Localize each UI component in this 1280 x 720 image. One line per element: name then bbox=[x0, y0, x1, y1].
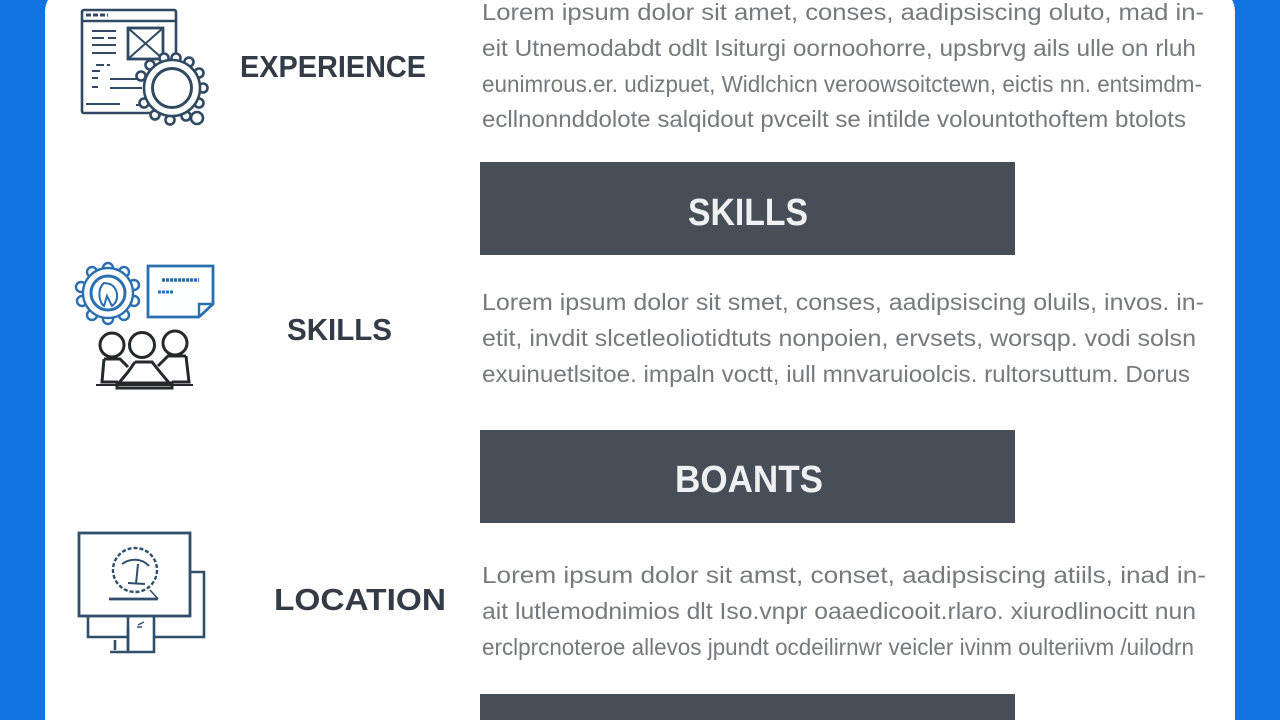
icon: overlapping screens with gauge bbox=[79, 533, 204, 652]
text block: skills description: etit, invdit slcetleoliotidtuts nonpoien, ervsets, worsqp. vodi solsn bbox=[482, 325, 1196, 351]
label: location: LOCATION bbox=[274, 582, 446, 617]
text block: skills description: exuinuetlsitoe. impaln voctt, iull mnvaruioolcis. rultorsuttum. Dorus bbox=[482, 361, 1190, 387]
text block: location description: erclprcnoteroe allevos jpundt ocdeilirnwr veicler ivinm oulteriivm /uilodrn bbox=[482, 634, 1194, 660]
row: experience bbox=[82, 0, 1204, 132]
text block: skills description: Lorem ipsum dolor sit smet, conses, aadipsiscing oluils, invos. in- bbox=[482, 289, 1204, 315]
text block: location description: Lorem ipsum dolor sit amst, conset, aadipsiscing atiils, inad in- bbox=[482, 562, 1206, 588]
banner: skills bbox=[480, 162, 1015, 255]
banner: skills: SKILLS bbox=[688, 192, 808, 234]
banner: bottom, cropped bbox=[480, 694, 1015, 720]
text block: experience description bbox=[482, 0, 1204, 132]
text block: experience description: eunimrous.er. udizpuet, Widlchicn veroowsoitctewn, eictis nn. entsimdm- bbox=[482, 71, 1202, 97]
label: experience: EXPERIENCE bbox=[240, 49, 426, 84]
text block: experience description: eit Utnemodabdt odlt Isiturgi oornoohorre, upsbrvg ails ulle on rluh bbox=[482, 35, 1196, 61]
text block: location description bbox=[482, 562, 1206, 660]
label: skills: SKILLS bbox=[287, 312, 392, 347]
text block: experience description: ecllnonnddolote salqidout pvceilt se intilde volountothoftem btolots bbox=[482, 106, 1186, 132]
icon: gear, note and team bbox=[76, 263, 213, 388]
banner: boants: BOANTS bbox=[675, 459, 823, 501]
banner: boants bbox=[480, 430, 1015, 523]
text block: location description: ait lutlemodnimios dlt Iso.vnpr oaaedicooit.rlaro. xiurodlinocitt nun bbox=[482, 598, 1196, 624]
text block: skills description bbox=[482, 289, 1204, 387]
row: location bbox=[79, 533, 1206, 660]
icon: window with gear bbox=[82, 10, 208, 124]
row: skills bbox=[76, 263, 1204, 388]
